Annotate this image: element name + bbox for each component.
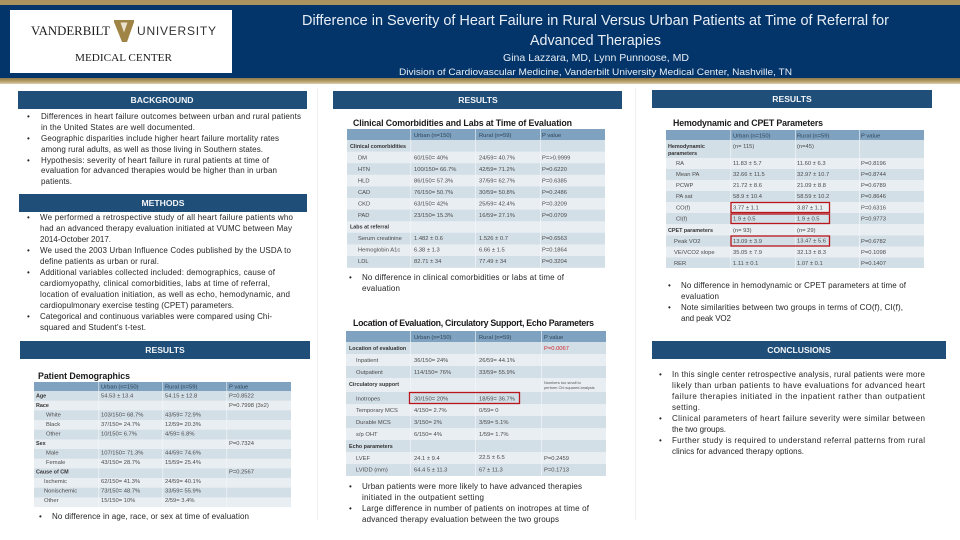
text block: location findings bbox=[349, 482, 590, 524]
table: location, support, echo: 67 ± 11.3 bbox=[479, 468, 503, 474]
table: hemodynamic and CPET: 1.9 ± 0.5 bbox=[733, 216, 756, 222]
logo: Vanderbilt University Medical Center: VANDERBILT bbox=[31, 23, 110, 38]
table title: location, support, echo: Location of Evaluation, Circulatory Support, Echo Parameters bbox=[353, 318, 594, 328]
table: patient demographics: Male bbox=[46, 450, 59, 456]
text block: location findings: initiated in the outpatient setting bbox=[362, 493, 484, 502]
table title: comorbidities and labs: Clinical Comorbidities and Labs at Time of Evaluation bbox=[353, 118, 572, 128]
table: comorbidities and labs: P=0.6563 bbox=[542, 236, 567, 242]
table: comorbidities and labs: 25/59= 42.4% bbox=[479, 202, 515, 208]
table: hemodynamic and CPET: P=0.9773 bbox=[861, 216, 886, 222]
table: location, support, echo: 22.5 ± 6.5 bbox=[479, 455, 505, 461]
table: comorbidities and labs: 100/150= 66.7% bbox=[414, 167, 456, 173]
table: patient demographics: 107/150= 71.3% bbox=[101, 450, 143, 456]
text block: background bullets bbox=[27, 112, 301, 186]
table: patient demographics: Other bbox=[46, 432, 61, 438]
table: comorbidities and labs: P=0.3204 bbox=[542, 259, 568, 265]
table: patient demographics: Other bbox=[44, 498, 59, 504]
text block: comorbidities finding bbox=[349, 273, 565, 293]
table: hemodynamic and CPET: Hemodynamic bbox=[668, 144, 705, 150]
text block: hemodynamic findings: • bbox=[668, 303, 671, 312]
table: patient demographics: 10/150= 6.7% bbox=[101, 432, 137, 438]
table: hemodynamic and CPET: VE/VCO2 slope bbox=[674, 250, 715, 256]
table: location, support, echo: 33/59= 55.9% bbox=[479, 370, 515, 376]
table: comorbidities and labs: 1.526 ± 0.7 bbox=[479, 236, 508, 242]
table: hemodynamic and CPET: P=0.6782 bbox=[861, 239, 886, 245]
panel: methods bbox=[19, 194, 307, 332]
table: patient demographics: 44/59= 74.6% bbox=[165, 450, 201, 456]
text block: methods bullets: define patients as urban or rural. bbox=[40, 257, 159, 266]
text block: methods bullets: • bbox=[27, 213, 30, 222]
table: comorbidities and labs: Urban (n=150) bbox=[414, 133, 452, 139]
text block: methods bullets: had an advanced therapy evaluation initiated at VUMC between May bbox=[40, 224, 292, 233]
table: comorbidities and labs: P=0.1864 bbox=[542, 248, 568, 254]
text block: hemodynamic findings: Note similarities between two groups in terms of CO(f), CI(f), bbox=[681, 303, 903, 312]
table: hemodynamic and CPET: (n= 29) bbox=[797, 228, 816, 234]
text block: background bullets: • bbox=[27, 134, 30, 143]
heading: results: RESULTS bbox=[145, 345, 185, 355]
table: hemodynamic and CPET: P=0.6789 bbox=[861, 183, 886, 189]
text block: location findings: • bbox=[349, 482, 352, 491]
table: hemodynamic and CPET: RER bbox=[674, 261, 686, 267]
table: patient demographics: P=0.8522 bbox=[229, 394, 254, 400]
table: comorbidities and labs: CKD bbox=[358, 202, 370, 208]
text block: conclusions bullets: • bbox=[659, 370, 662, 379]
table: hemodynamic and CPET bbox=[666, 130, 924, 268]
table: patient demographics: 37/150= 24.7% bbox=[101, 422, 140, 428]
table: patient demographics: 24/59= 40.1% bbox=[165, 479, 201, 485]
text block: background bullets: • bbox=[27, 112, 30, 121]
text block: location findings: advanced therapy evaluation between the two groups bbox=[362, 515, 559, 524]
text block: hemodynamic findings: • bbox=[668, 281, 671, 290]
table: hemodynamic and CPET: 3.77 ± 1.1 bbox=[733, 206, 759, 212]
text block: conclusions bullets: the two groups. bbox=[672, 425, 726, 434]
heading: results: RESULTS bbox=[772, 94, 812, 104]
text block: background bullets: Geographic disparities include higher heart failure mortality rates bbox=[41, 134, 279, 143]
text block: methods bullets: Additional variables collected included: demographics, cause of bbox=[40, 268, 276, 277]
table: comorbidities and labs: P=0.6385 bbox=[542, 178, 567, 184]
table: patient demographics: Cause of CM bbox=[36, 470, 69, 476]
table: patient demographics: 62/150= 41.3% bbox=[101, 479, 140, 485]
affiliation: Division of Cardiovascular Medicine, Vanderbilt University Medical Center, Nashville, TN bbox=[399, 67, 792, 77]
table: patient demographics: 43/150= 28.7% bbox=[101, 460, 140, 466]
table: location, support, echo: 64.4 5 ± 11.3 bbox=[414, 468, 447, 474]
table: comorbidities and labs: P=0.2486 bbox=[542, 190, 567, 196]
text block: conclusions bullets: Clinical parameters of heart failure severity were similar between bbox=[672, 414, 925, 423]
text block: hemodynamic findings: No difference in hemodynamic or CPET parameters at time of bbox=[681, 281, 907, 290]
table: hemodynamic and CPET: 58.9 ± 10.4 bbox=[733, 194, 763, 200]
table: patient demographics: Nonischemic bbox=[44, 488, 77, 494]
table: hemodynamic and CPET: 11.60 ± 6.3 bbox=[797, 161, 826, 167]
highlight: CO(f) row bbox=[731, 202, 830, 212]
table: comorbidities and labs: 42/59= 71.2% bbox=[479, 167, 515, 173]
text block: conclusions bullets bbox=[659, 370, 926, 456]
title: Difference in Severity of Heart Failure in Rural Versus Urban Patients at Time of Referral for bbox=[302, 13, 889, 29]
table: comorbidities and labs: 6.38 ± 1.3 bbox=[414, 248, 440, 254]
text block: methods bullets: • bbox=[27, 268, 30, 277]
heading: conclusions bbox=[652, 341, 946, 359]
logo: Vanderbilt University Medical Center: UNIVERSITY bbox=[137, 24, 216, 38]
heading: results bbox=[20, 341, 310, 359]
panel: conclusions bbox=[652, 341, 946, 456]
text block: conclusions bullets: clinics for advanced therapy options. bbox=[672, 447, 804, 456]
table: location, support, echo: P value bbox=[544, 335, 563, 341]
table: location, support, echo: Circulatory support bbox=[349, 382, 399, 388]
table: hemodynamic and CPET: RA bbox=[676, 161, 684, 167]
table: location, support, echo: 0/59= 0 bbox=[479, 408, 499, 414]
table: comorbidities and labs: 1.482 ± 0.6 bbox=[414, 236, 443, 242]
table: hemodynamic and CPET: CPET parameters bbox=[668, 228, 713, 234]
table: patient demographics: 12/59= 20.3% bbox=[165, 422, 201, 428]
table title: hemodynamic and CPET: Hemodynamic and CPET Parameters bbox=[673, 118, 823, 128]
heading: background: BACKGROUND bbox=[130, 95, 194, 105]
text block: methods bullets bbox=[27, 213, 294, 332]
table: location, support, echo: Numbers too small to bbox=[544, 380, 581, 385]
table: comorbidities and labs: 37/59= 62.7% bbox=[479, 178, 515, 184]
heading: conclusions: CONCLUSIONS bbox=[767, 345, 831, 355]
table: hemodynamic and CPET: (n= 93) bbox=[733, 228, 752, 234]
table: comorbidities and labs: P=0.0709 bbox=[542, 213, 567, 219]
table: comorbidities and labs: P=>0.9999 bbox=[542, 156, 570, 162]
panel: results, comorbidities and location bbox=[333, 91, 622, 524]
table: hemodynamic and CPET: Mean PA bbox=[676, 172, 700, 178]
panel: results, hemodynamic and CPET bbox=[652, 90, 932, 323]
table: hemodynamic and CPET: P=0.8744 bbox=[861, 172, 887, 178]
table: comorbidities and labs: P=0.6220 bbox=[542, 167, 567, 173]
table: hemodynamic and CPET: 1.07 ± 0.1 bbox=[797, 261, 823, 267]
table: location, support, echo: 30/150= 20% bbox=[414, 396, 448, 402]
text block: methods bullets: • bbox=[27, 246, 30, 255]
table: patient demographics: 2/59= 3.4% bbox=[165, 498, 194, 504]
text block: methods bullets: cardiopulmonary exercise testing (CPET) parameters. bbox=[40, 301, 234, 310]
table: hemodynamic and CPET: CI(f) bbox=[676, 216, 687, 222]
table: hemodynamic and CPET: 32.97 ± 10.7 bbox=[797, 172, 829, 178]
highlight: CI(f) row bbox=[731, 214, 830, 224]
table: comorbidities and labs: 63/150= 42% bbox=[414, 202, 448, 208]
text block: methods bullets: We used the 2003 Urban Influence Codes published by the USDA to bbox=[40, 246, 292, 255]
table: hemodynamic and CPET: PA sat bbox=[676, 194, 693, 200]
table: location, support, echo: Inpatient bbox=[356, 358, 379, 364]
table: hemodynamic and CPET: 21.72 ± 8.6 bbox=[733, 183, 762, 189]
text block: conclusions bullets: failure therapies initiated in the inpatient rather than outpatient bbox=[672, 392, 926, 401]
table: comorbidities and labs: Serum creatinine bbox=[358, 236, 402, 242]
text block: background bullets: • bbox=[27, 156, 30, 165]
text block: demographics finding: No difference in age, race, or sex at time of evaluation bbox=[52, 512, 249, 521]
table: hemodynamic and CPET: (n= 115) bbox=[733, 144, 754, 150]
table: comorbidities and labs: 60/150= 40% bbox=[414, 156, 448, 162]
table: comorbidities and labs: HLD bbox=[358, 178, 370, 184]
table: location, support, echo: 3/150= 2% bbox=[414, 420, 442, 426]
text block: background bullets: evaluation for advanced therapies would be higher than in urban bbox=[41, 166, 277, 175]
table: hemodynamic and CPET: P=0.6316 bbox=[861, 206, 886, 212]
table: hemodynamic and CPET: (n=45) bbox=[797, 144, 814, 150]
text block: methods bullets: cardiomyopathy, clinical comorbidities, labs at time of referral, bbox=[40, 279, 270, 288]
text block: hemodynamic findings: evaluation bbox=[681, 292, 719, 301]
table: location, support, echo: P=0.2459 bbox=[544, 456, 569, 462]
heading: results bbox=[652, 90, 932, 108]
text block: background bullets: among rural adults, as well as those living in Southern states. bbox=[41, 145, 263, 154]
table: comorbidities and labs: HTN bbox=[358, 167, 370, 173]
text block: methods bullets: We performed a retrospective study of all heart failure patients who bbox=[40, 213, 294, 222]
text block: methods bullets: • bbox=[27, 312, 30, 321]
table: hemodynamic and CPET: P=0.1407 bbox=[861, 261, 886, 267]
table: hemodynamic and CPET: P=0.8646 bbox=[861, 194, 886, 200]
text block: hemodynamic findings: and peak VO2 bbox=[681, 314, 732, 323]
heading: results bbox=[333, 91, 622, 109]
header banner bbox=[0, 0, 960, 84]
heading: results: RESULTS bbox=[458, 95, 498, 105]
text block: background bullets: in the United States are well documented. bbox=[41, 123, 195, 132]
table: hemodynamic and CPET: 32.13 ± 8.3 bbox=[797, 250, 826, 256]
text block: comorbidities finding: • bbox=[349, 273, 352, 282]
table: patient demographics: Sex bbox=[36, 441, 46, 447]
text block: location findings: Urban patients were more likely to have advanced therapies bbox=[362, 482, 582, 491]
table: location, support, echo: LVEF bbox=[356, 456, 371, 462]
table: location, support, echo: 1/59= 1.7% bbox=[479, 432, 508, 438]
text block: location findings: Large difference in number of patients on inotropes at time of bbox=[362, 504, 590, 513]
table: hemodynamic and CPET: 3.87 ± 1.1 bbox=[797, 206, 823, 212]
table: location, support, echo: Urban (n=150) bbox=[414, 335, 452, 341]
table: patient demographics: White bbox=[46, 412, 61, 418]
table: location, support, echo: 6/150= 4% bbox=[414, 432, 442, 438]
title bbox=[302, 13, 889, 49]
table: location, support, echo: Durable MCS bbox=[356, 420, 391, 426]
table: comorbidities and labs: Rural (n=59) bbox=[479, 133, 511, 139]
table: hemodynamic and CPET: parameters bbox=[668, 151, 697, 157]
text block: background bullets: Hypothesis: severity of heart failure in rural patients at time of bbox=[41, 156, 270, 165]
table: location, support, echo: Temporary MCS bbox=[356, 408, 398, 414]
table: comorbidities and labs: LDL bbox=[358, 259, 369, 265]
table: location, support, echo: LVIDD (mm) bbox=[356, 468, 388, 474]
table: comorbidities and labs: PAD bbox=[358, 213, 370, 219]
table: location, support, echo: perform Chi squared analysis bbox=[544, 385, 595, 390]
table: location, support, echo: P=0.1713 bbox=[544, 468, 569, 474]
table: comorbidities and labs: P=0.3209 bbox=[542, 202, 567, 208]
table: hemodynamic and CPET: 11.83 ± 5.7 bbox=[733, 161, 762, 167]
text block: conclusions bullets: Further study is required to understand referral patterns from rural bbox=[672, 436, 925, 445]
title: Advanced Therapies bbox=[530, 33, 661, 49]
table: comorbidities and labs: 16/59= 27.1% bbox=[479, 213, 515, 219]
text block: demographics finding: • bbox=[39, 512, 42, 521]
table: patient demographics: 15/59= 25.4% bbox=[165, 460, 201, 466]
table: hemodynamic and CPET: 21.09 ± 8.8 bbox=[797, 183, 826, 189]
text block: conclusions bullets: • bbox=[659, 414, 662, 423]
table: hemodynamic and CPET: 1.9 ± 0.5 bbox=[797, 216, 820, 222]
panel: results, patient demographics bbox=[20, 341, 310, 521]
logo: Vanderbilt University Medical Center bbox=[10, 10, 232, 73]
table: patient demographics: Rural (n=59) bbox=[165, 384, 197, 390]
table: hemodynamic and CPET: Rural (n=59) bbox=[797, 134, 829, 140]
table: patient demographics: 15/150= 10% bbox=[101, 498, 135, 504]
table: location, support, echo: 18/59= 36.7% bbox=[479, 396, 515, 402]
table: comorbidities and labs: P value bbox=[542, 133, 561, 139]
table: hemodynamic and CPET: CO(f) bbox=[676, 206, 690, 212]
text block: background bullets: Differences in heart failure outcomes between urban and rural patients bbox=[41, 112, 301, 121]
table: hemodynamic and CPET: 13.09 ± 3.9 bbox=[733, 239, 762, 245]
text block: conclusions bullets: In this single center retrospective analysis, rural patients were more bbox=[672, 370, 926, 379]
text block: conclusions bullets: likely than urban patients to have evaluations for advanced heart bbox=[672, 381, 926, 390]
text block: conclusions bullets: setting. bbox=[672, 403, 700, 412]
authors: Gina Lazzara, MD, Lynn Punnoose, MD bbox=[503, 52, 689, 64]
heading: background bbox=[18, 91, 307, 109]
table: hemodynamic and CPET: 35.05 ± 7.9 bbox=[733, 250, 762, 256]
table: comorbidities and labs: Hemoglobin A1c bbox=[358, 248, 400, 254]
table: patient demographics bbox=[34, 382, 291, 507]
heading: methods: METHODS bbox=[142, 198, 185, 208]
table: location, support, echo: 26/59= 44.1% bbox=[479, 358, 515, 364]
table: location, support, echo: 3/59= 5.1% bbox=[479, 420, 508, 426]
table: location, support, echo: 36/150= 24% bbox=[414, 358, 448, 364]
text block: methods bullets: location of evaluation initiation, as well as echo, hemodynamic, and bbox=[40, 290, 290, 299]
table: location, support, echo: 114/150= 76% bbox=[414, 370, 451, 376]
table: patient demographics: P value bbox=[229, 384, 248, 390]
table: location, support, echo: Location of evaluation bbox=[349, 346, 406, 352]
table: comorbidities and labs: 24/59= 40.7% bbox=[479, 156, 515, 162]
text block: methods bullets: squared and Student's t-test. bbox=[40, 323, 146, 332]
text block: background bullets: patients. bbox=[41, 177, 72, 186]
table: comorbidities and labs: 6.66 ± 1.5 bbox=[479, 248, 505, 254]
table: hemodynamic and CPET: Urban (n=150) bbox=[733, 134, 771, 140]
table: comorbidities and labs: Labs at referral bbox=[350, 224, 389, 230]
table: hemodynamic and CPET: 58.59 ± 10.2 bbox=[797, 194, 829, 200]
highlight: inotropes row bbox=[410, 392, 520, 404]
text block: methods bullets: 2014-October 2017. bbox=[40, 235, 111, 244]
table: comorbidities and labs: Clinical comorbidities bbox=[350, 144, 406, 150]
table: location, support, echo: 24.1 ± 9.4 bbox=[414, 456, 441, 462]
table: patient demographics: 43/59= 72.9% bbox=[165, 412, 201, 418]
table: patient demographics: 54.15 ± 12.8 bbox=[165, 394, 197, 400]
table: location, support, echo: Inotropes bbox=[356, 396, 380, 402]
heading: methods bbox=[19, 194, 307, 212]
text block: location findings: • bbox=[349, 504, 352, 513]
table: location, support, echo bbox=[346, 331, 606, 476]
table: location, support, echo: Echo parameters bbox=[349, 444, 393, 450]
text block: comorbidities finding: No difference in clinical comorbidities or labs at time of bbox=[362, 273, 565, 282]
text block: methods bullets: Categorical and continuous variables were compared using Chi- bbox=[40, 312, 272, 321]
text block: comorbidities finding: evaluation bbox=[362, 284, 400, 293]
table: patient demographics: Race bbox=[36, 403, 49, 409]
table: hemodynamic and CPET: P=0.8196 bbox=[861, 161, 886, 167]
table: location, support, echo: s/p OHT bbox=[356, 432, 378, 438]
table: hemodynamic and CPET: 32.66 ± 11.5 bbox=[733, 172, 765, 178]
table: patient demographics: P=0.2567 bbox=[229, 470, 254, 476]
table title: patient demographics: Patient Demographics bbox=[38, 371, 130, 381]
table: comorbidities and labs: 82.71 ± 34 bbox=[414, 259, 442, 265]
table: patient demographics: 103/150= 68.7% bbox=[101, 412, 143, 418]
text block: hemodynamic findings bbox=[668, 281, 907, 323]
table: patient demographics: P=0.7998 (3x2) bbox=[229, 403, 269, 409]
table: comorbidities and labs: DM bbox=[358, 156, 367, 162]
table: patient demographics: Age bbox=[36, 394, 46, 400]
table: comorbidities and labs: 30/59= 50.8% bbox=[479, 190, 515, 196]
table: comorbidities and labs: CAD bbox=[358, 190, 370, 196]
table: patient demographics: 33/59= 55.9% bbox=[165, 488, 201, 494]
table: patient demographics: 73/150= 48.7% bbox=[101, 488, 140, 494]
table: patient demographics: Female bbox=[46, 460, 65, 466]
table: location, support, echo: P=0.0067 bbox=[544, 346, 569, 352]
table: patient demographics: Urban (n=150) bbox=[101, 384, 139, 390]
table: comorbidities and labs: 86/150= 57.3% bbox=[414, 178, 453, 184]
logo: Vanderbilt University Medical Center: MEDICAL CENTER bbox=[75, 52, 173, 64]
table: hemodynamic and CPET: 1.11 ± 0.1 bbox=[733, 261, 758, 267]
highlight: peak VO2 row bbox=[731, 236, 830, 246]
table: patient demographics: 54.53 ± 13.4 bbox=[101, 394, 134, 400]
text block: conclusions bullets: • bbox=[659, 436, 662, 445]
table: location, support, echo: Outpatient bbox=[356, 370, 383, 376]
table: patient demographics: P=0.7324 bbox=[229, 441, 255, 447]
table: location, support, echo: Rural (n=59) bbox=[479, 335, 511, 341]
table: patient demographics: Black bbox=[46, 422, 60, 428]
panel: background bbox=[18, 91, 307, 186]
table: hemodynamic and CPET: PCWP bbox=[676, 183, 694, 189]
table: hemodynamic and CPET: P value bbox=[861, 134, 880, 140]
table: hemodynamic and CPET: P=0.1098 bbox=[861, 250, 886, 256]
table: patient demographics: 4/59= 6.8% bbox=[165, 432, 194, 438]
table: comorbidities and labs: 76/150= 50.7% bbox=[414, 190, 453, 196]
table: patient demographics: Ischemic bbox=[44, 479, 67, 485]
table: hemodynamic and CPET: Peak VO2 bbox=[674, 239, 700, 245]
table: hemodynamic and CPET: 13.47 ± 5.6 bbox=[797, 238, 826, 244]
table: location, support, echo: 4/150= 2.7% bbox=[414, 408, 447, 414]
table: comorbidities and labs: 23/150= 15.3% bbox=[414, 213, 453, 219]
table: comorbidities and labs bbox=[347, 129, 605, 268]
table: comorbidities and labs: 77.49 ± 34 bbox=[479, 259, 507, 265]
